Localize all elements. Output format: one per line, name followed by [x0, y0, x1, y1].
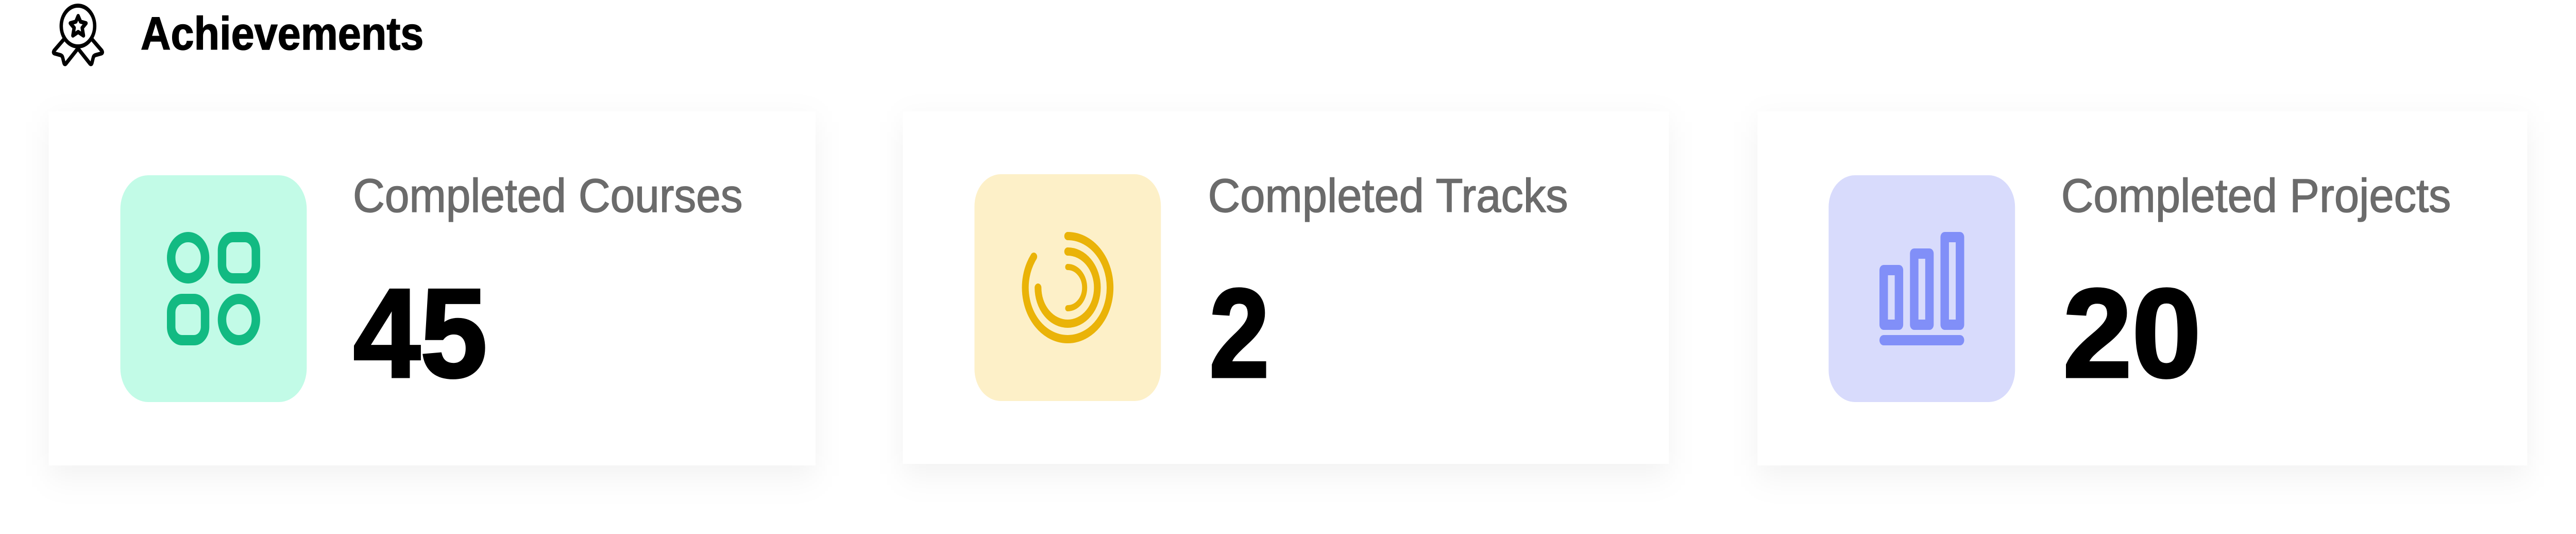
icon: medal — [54, 6, 103, 64]
label: completed tracks: Completed Tracks — [1208, 169, 1568, 222]
value: 20: 20 — [2063, 262, 2201, 404]
icon tile: courses — [121, 175, 307, 402]
title: Achievements — [141, 8, 423, 60]
header: achievements — [54, 6, 423, 64]
icon tile: tracks — [974, 174, 1161, 401]
panel: completed courses — [49, 111, 816, 476]
panel: completed projects — [1757, 111, 2527, 476]
label: completed courses: Completed Courses — [353, 169, 743, 222]
value: 45: 45 — [353, 262, 487, 404]
panel: completed tracks — [903, 111, 1669, 474]
value: 2: 2 — [1209, 262, 1269, 404]
label: completed projects: Completed Projects — [2061, 169, 2451, 222]
icon tile: projects — [1828, 175, 2015, 402]
